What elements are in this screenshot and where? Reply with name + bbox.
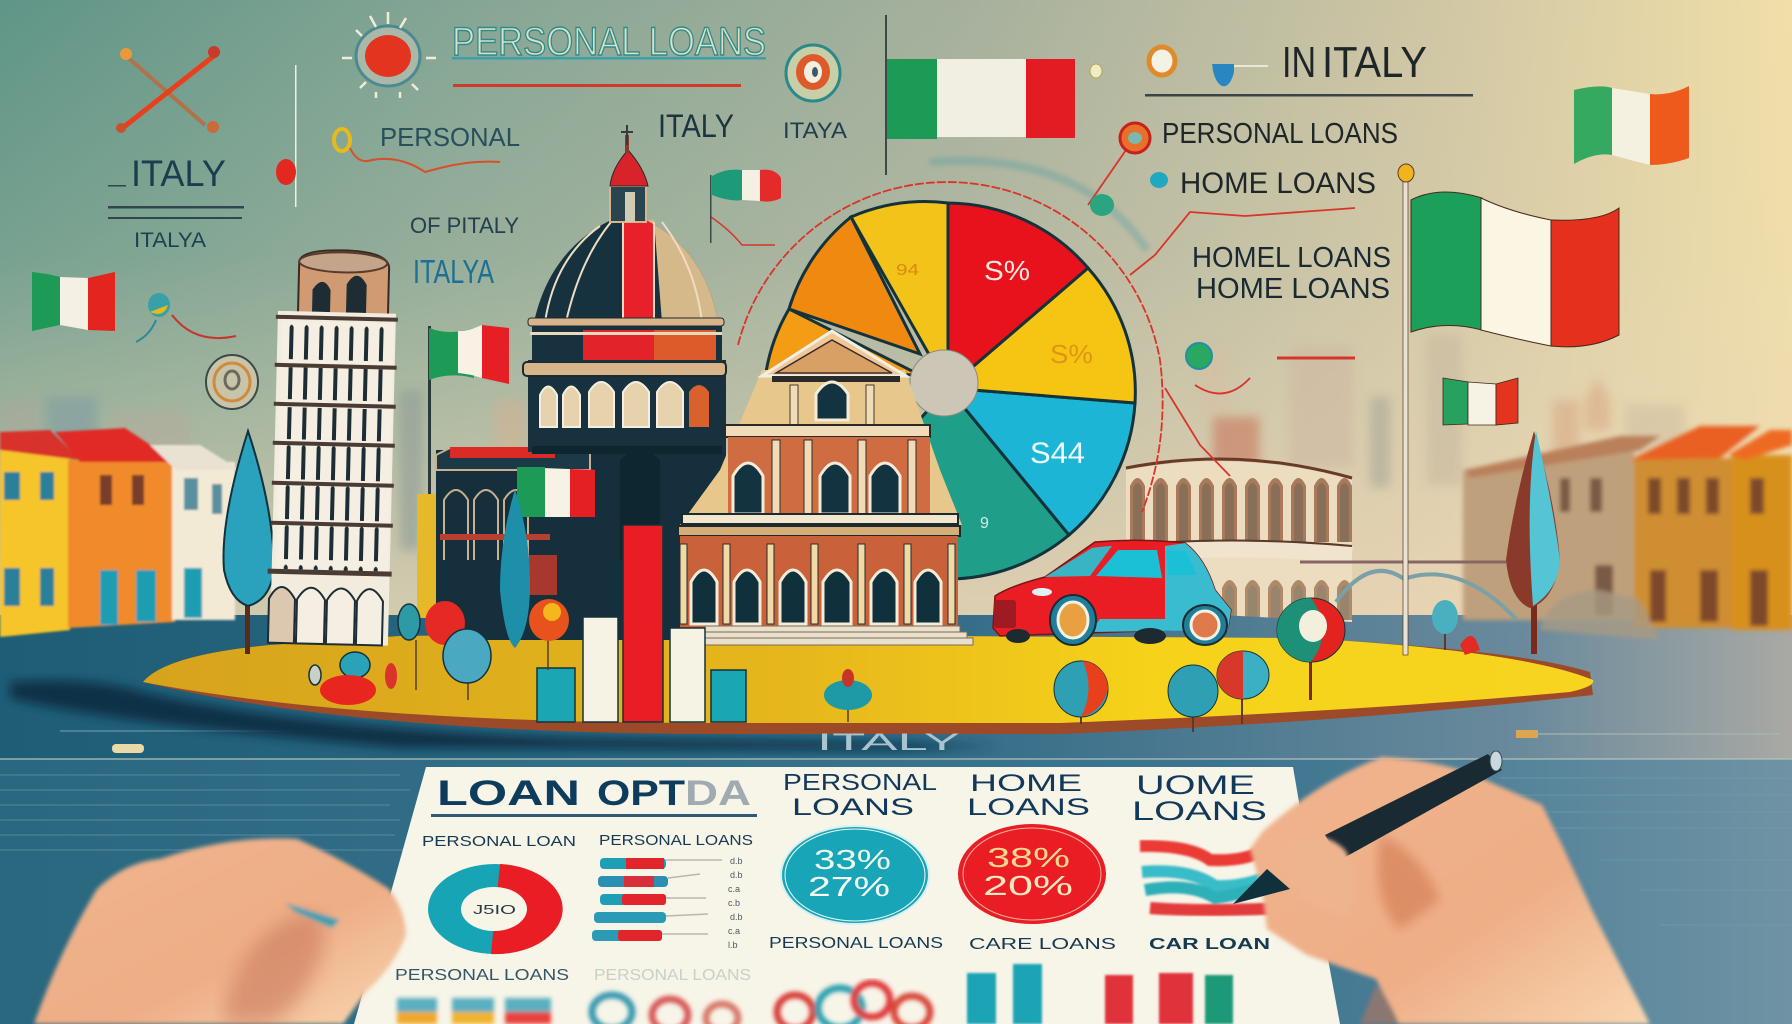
palace ground floor (680, 536, 958, 628)
subheading left: PERSONAL LOAN (422, 833, 576, 850)
icon: crossed tools (116, 46, 220, 133)
blurred skyline (0, 335, 1685, 550)
palace central arch (816, 382, 848, 420)
red rate circle: 38% (987, 842, 1070, 873)
bottom blurred charts (397, 983, 930, 1024)
column heading dome loans: LOANS (1132, 796, 1267, 826)
icon: pin with squiggle (136, 293, 236, 342)
cypress tree middle (500, 489, 530, 648)
flag pole and yellow bar (417, 326, 437, 618)
tower floors (281, 321, 394, 366)
donut chart: J5IO (473, 902, 516, 917)
text: personal loans right: PERSONAL LOANS (1162, 118, 1398, 150)
big flag right (1411, 192, 1619, 347)
label faded: PERSONAL LOANS (594, 967, 751, 984)
pen (1233, 751, 1502, 904)
colosseum (1126, 459, 1352, 622)
label care loans: CARE LOANS (969, 936, 1116, 953)
red rate circle (958, 824, 1106, 924)
lower building (436, 450, 726, 640)
flag behind cathedral (429, 325, 509, 384)
left text rules (108, 185, 244, 219)
palace steps (705, 626, 973, 645)
horizontal bars: d.b (730, 912, 743, 922)
icon: cyan bullet (1150, 172, 1168, 188)
wavy line chart (1140, 846, 1285, 910)
pie label green: 9 (980, 515, 989, 532)
buildings: right street (1463, 426, 1792, 640)
white bars (583, 617, 618, 722)
text on ground: ITALY (817, 729, 960, 756)
palace upper arches (728, 437, 930, 527)
small flag on pole (710, 170, 781, 243)
small flag right (1443, 378, 1518, 425)
tower top (298, 249, 390, 318)
column heading home loans (967, 770, 1090, 821)
text: personal: PERSONAL (380, 122, 520, 152)
horizontal bars: d.b (730, 870, 743, 880)
label personal loans bottom: PERSONAL LOANS (395, 967, 569, 984)
pie: right yellow slice (948, 268, 1135, 403)
text: italy top: ITALY (658, 108, 734, 144)
icon: green pin (1090, 194, 1114, 216)
dome shell (534, 220, 718, 322)
drum upper (532, 324, 722, 362)
label personal loans lower: PERSONAL LOANS (769, 935, 943, 952)
sheet title: DA (685, 774, 751, 813)
icon: header dots right (1090, 47, 1268, 86)
heading: in italy (1282, 38, 1427, 87)
cyan rate circle (781, 826, 929, 924)
donut chart (428, 864, 563, 954)
callout lines (711, 150, 1355, 476)
text: home loans: HOME LOANS (1180, 167, 1376, 200)
palace upper tier (680, 370, 962, 525)
column heading dome loans: UOME (1136, 770, 1255, 800)
horizontal bars: l.b (728, 940, 738, 950)
bottom bar chart (967, 964, 1233, 1024)
pie: red slice (948, 203, 1088, 388)
pie label red: S% (984, 255, 1030, 286)
horizontal bars: c.b (728, 898, 740, 908)
pie: cyan slice (948, 388, 1135, 535)
horizontal bars (592, 856, 743, 950)
leaning tower (266, 249, 400, 646)
pie hub (910, 350, 978, 416)
text: italya small: ITALYA (134, 229, 206, 252)
bridge (1300, 562, 1516, 619)
text: homel loans: HOMEL LOANS (1192, 242, 1391, 274)
horizontal bars: c.a (728, 884, 740, 894)
title rule (431, 814, 757, 817)
sheet title: LOAN (437, 774, 580, 813)
island platform (10, 634, 1593, 750)
flag on palace left (517, 467, 595, 517)
pie label cyan: S44 (1030, 437, 1085, 470)
palace facade (678, 331, 973, 645)
subheading middle: PERSONAL LOANS (599, 832, 753, 849)
pie chart (766, 202, 1135, 579)
sheet title: OPT (597, 774, 685, 813)
right hand (1250, 757, 1650, 1024)
icon: ring left (206, 355, 258, 409)
car (993, 540, 1231, 645)
heading: in italy: ITALY (1322, 38, 1427, 87)
cypress tree left (224, 431, 274, 654)
car wheels (1050, 595, 1096, 645)
red bar (623, 525, 663, 722)
thumb over pen (1278, 836, 1355, 915)
drum (528, 360, 726, 452)
column heading dome loans (1132, 770, 1267, 826)
horizontal bars: c.a (728, 926, 740, 936)
pie ring arcs (738, 161, 1163, 512)
cypress tree right (1506, 431, 1560, 654)
icon: yellow ring with squiggle (334, 129, 500, 172)
heading: in italy: IN (1282, 38, 1316, 87)
document sheet (354, 767, 1340, 1024)
left hand (34, 838, 406, 1024)
pie: green slice (820, 388, 1069, 579)
column heading home loans: HOME (970, 770, 1082, 797)
flag top centre (885, 15, 1075, 175)
pie: top yellow slice (851, 202, 948, 388)
icon: orange ring bullet (1120, 123, 1150, 153)
sheet title (437, 774, 751, 813)
small flag left (32, 272, 115, 331)
tower cornices (268, 315, 398, 577)
buildings: left street (0, 428, 240, 637)
column heading personal loans (783, 769, 937, 821)
palace entablature (682, 514, 958, 524)
icon: green blob (1186, 343, 1212, 369)
vertical divider with red dot (276, 65, 296, 207)
heading underlines (452, 57, 766, 87)
heading: personal loans: PERSONAL LOANS (452, 20, 766, 64)
text: itaya: ITAYA (783, 118, 847, 143)
column heading personal loans: PERSONAL (783, 769, 937, 795)
text: home loans second: HOME LOANS (1196, 273, 1390, 305)
bar chart on island (537, 525, 746, 722)
small trees left (309, 599, 872, 722)
cyan rate circle: 27% (808, 871, 890, 902)
text: of pitaly: OF PITALY (410, 213, 519, 238)
background sky (0, 0, 1792, 700)
flag top right (1574, 86, 1689, 165)
label car loan: CAR LOAN (1149, 936, 1270, 953)
tower base arches (268, 587, 295, 643)
icon: red sun target (342, 12, 436, 98)
pie: lower orange slice (766, 309, 920, 375)
pie label yellow: S% (1050, 339, 1093, 369)
pie label left: 94 (896, 262, 919, 279)
teal bars (537, 668, 575, 722)
column heading home loans: LOANS (967, 794, 1090, 821)
cyan rate circle: 33% (814, 844, 891, 875)
tall flag pole (1398, 164, 1414, 655)
horizontal bars: d.b (730, 856, 743, 866)
small trees right (1054, 598, 1480, 732)
lantern (610, 186, 646, 222)
pie: orange slice (789, 217, 920, 354)
text: italy left: ITALY (131, 153, 226, 194)
icon: ring badge (786, 45, 840, 101)
text: italya blue: ITALYA (413, 253, 494, 290)
cathedral dome building (436, 125, 726, 640)
rule below in italy (1145, 94, 1473, 96)
ground (0, 615, 1792, 1024)
red rate circle: 20% (983, 870, 1073, 901)
column heading personal loans: LOANS (792, 794, 914, 821)
